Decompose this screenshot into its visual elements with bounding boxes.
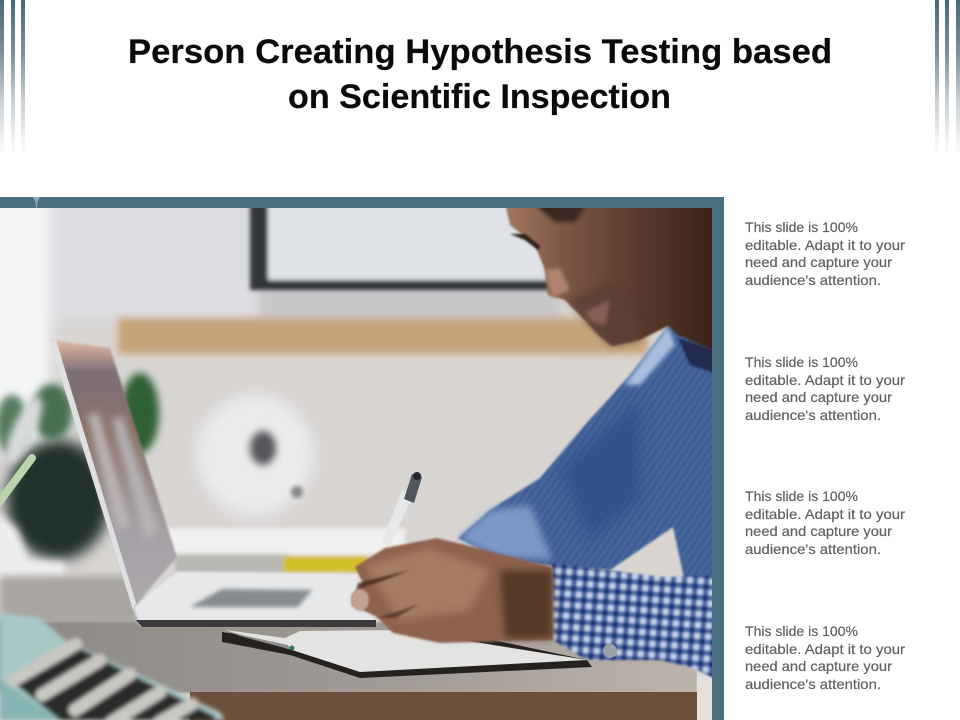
typewriter in the foreground: [0, 612, 225, 720]
books behind laptop: [165, 528, 405, 572]
text block 2: editable. Adapt it to your: [745, 372, 905, 388]
text block 1: This slide is 100%: [745, 219, 858, 235]
plant: [0, 373, 159, 560]
shirt body and sleeve: [458, 326, 740, 580]
frame pin: [33, 197, 40, 208]
cuff: [550, 562, 712, 679]
blurred object on the shelf: [197, 395, 313, 515]
text block 1: audience's attention.: [745, 272, 881, 288]
text block 1: [745, 219, 905, 288]
text block 2: This slide is 100%: [745, 354, 858, 370]
text block 4: need and capture your: [745, 658, 892, 674]
title: on Scientific Inspection: [288, 78, 671, 116]
text block 4: audience's attention.: [745, 676, 881, 692]
text block 3: This slide is 100%: [745, 488, 858, 504]
floor beyond desk: [697, 670, 712, 720]
text block 3: audience's attention.: [745, 541, 881, 557]
photo frame: [0, 197, 724, 720]
desk front in wood: [190, 692, 697, 720]
plant pot: [0, 510, 65, 582]
desk, far side: [0, 576, 140, 626]
wooden shelf: [118, 318, 648, 354]
text block 2: [745, 354, 905, 423]
wall background: [0, 190, 712, 720]
text block 4: This slide is 100%: [745, 623, 858, 639]
desk top: [0, 622, 700, 693]
text block 3: editable. Adapt it to your: [745, 506, 905, 522]
text block 4: editable. Adapt it to your: [745, 641, 905, 657]
decorative stripes: top right: [935, 0, 960, 155]
hand: [351, 538, 553, 643]
photo: man writing at a desk beside a laptop: [0, 190, 740, 720]
text block 1: need and capture your: [745, 254, 892, 270]
laptop: [50, 340, 376, 627]
straw: [0, 458, 32, 505]
title: Person Creating Hypothesis Testing based: [128, 33, 832, 71]
text block 2: need and capture your: [745, 389, 892, 405]
text block 3: need and capture your: [745, 523, 892, 539]
pen: [382, 472, 422, 545]
window: [250, 200, 560, 290]
text block 4: [745, 623, 905, 692]
notebook: [222, 630, 592, 678]
face and neck: [504, 208, 712, 351]
text block 3: [745, 488, 905, 557]
text block 2: audience's attention.: [745, 407, 881, 423]
text block 1: editable. Adapt it to your: [745, 237, 905, 253]
title: [128, 33, 832, 116]
cuff button: [603, 644, 617, 658]
decorative stripes: top left: [0, 0, 25, 155]
